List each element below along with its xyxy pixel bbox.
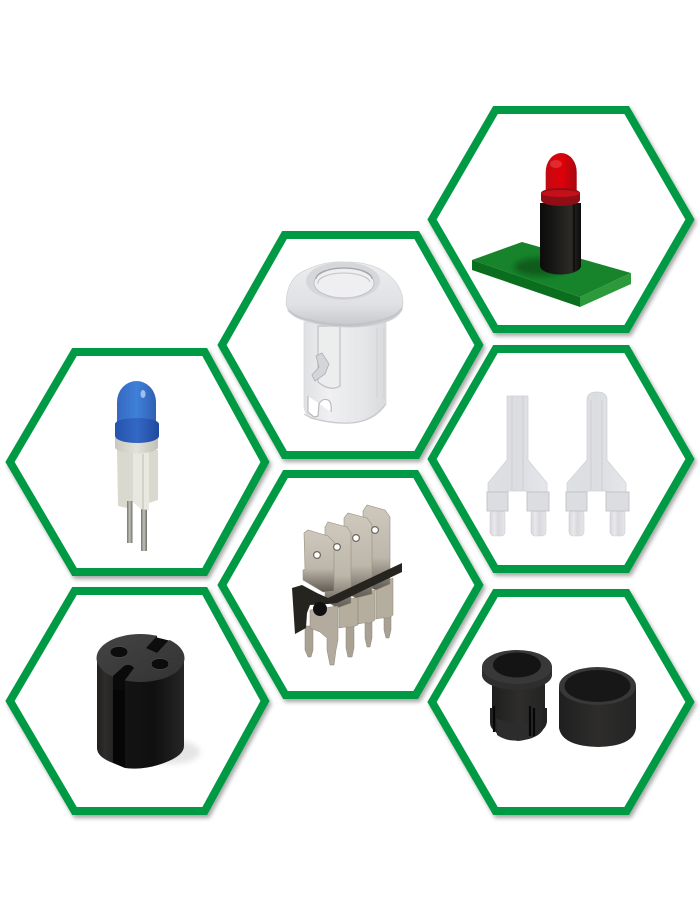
icon: terminal block xyxy=(292,505,402,665)
icon: black spacer cylinder xyxy=(96,631,200,769)
light pipe: domed top xyxy=(566,392,629,536)
terminal tabs xyxy=(303,505,390,608)
hexagon frame: terminal block xyxy=(222,474,479,695)
terminal tab holes xyxy=(314,527,378,558)
hexagon frame: red LED xyxy=(432,110,690,329)
hexagon frame: light pipes xyxy=(432,349,690,569)
icon: clear lens holder xyxy=(286,262,403,423)
hexagon frame: blue LED xyxy=(10,352,265,572)
hexagon frame: black spacer xyxy=(10,591,265,811)
black bar xyxy=(292,563,402,634)
terminal rear plates xyxy=(339,578,393,628)
spacer back slot xyxy=(146,632,169,653)
icon: black bushings xyxy=(482,650,636,747)
bushing: slotted sleeve xyxy=(482,650,552,741)
spacer front slot xyxy=(113,665,134,690)
icon: blue LED with pins xyxy=(115,381,159,551)
light pipe: flat top xyxy=(487,396,549,536)
bushing: ring xyxy=(559,667,636,747)
hexagon frame: clear lens xyxy=(222,235,479,455)
icon: light pipes xyxy=(487,392,629,536)
hexagon frame: black bushings xyxy=(432,593,690,811)
terminal front pin xyxy=(310,606,338,665)
terminal pins xyxy=(305,600,391,657)
icon: red LED on green board xyxy=(472,153,631,307)
